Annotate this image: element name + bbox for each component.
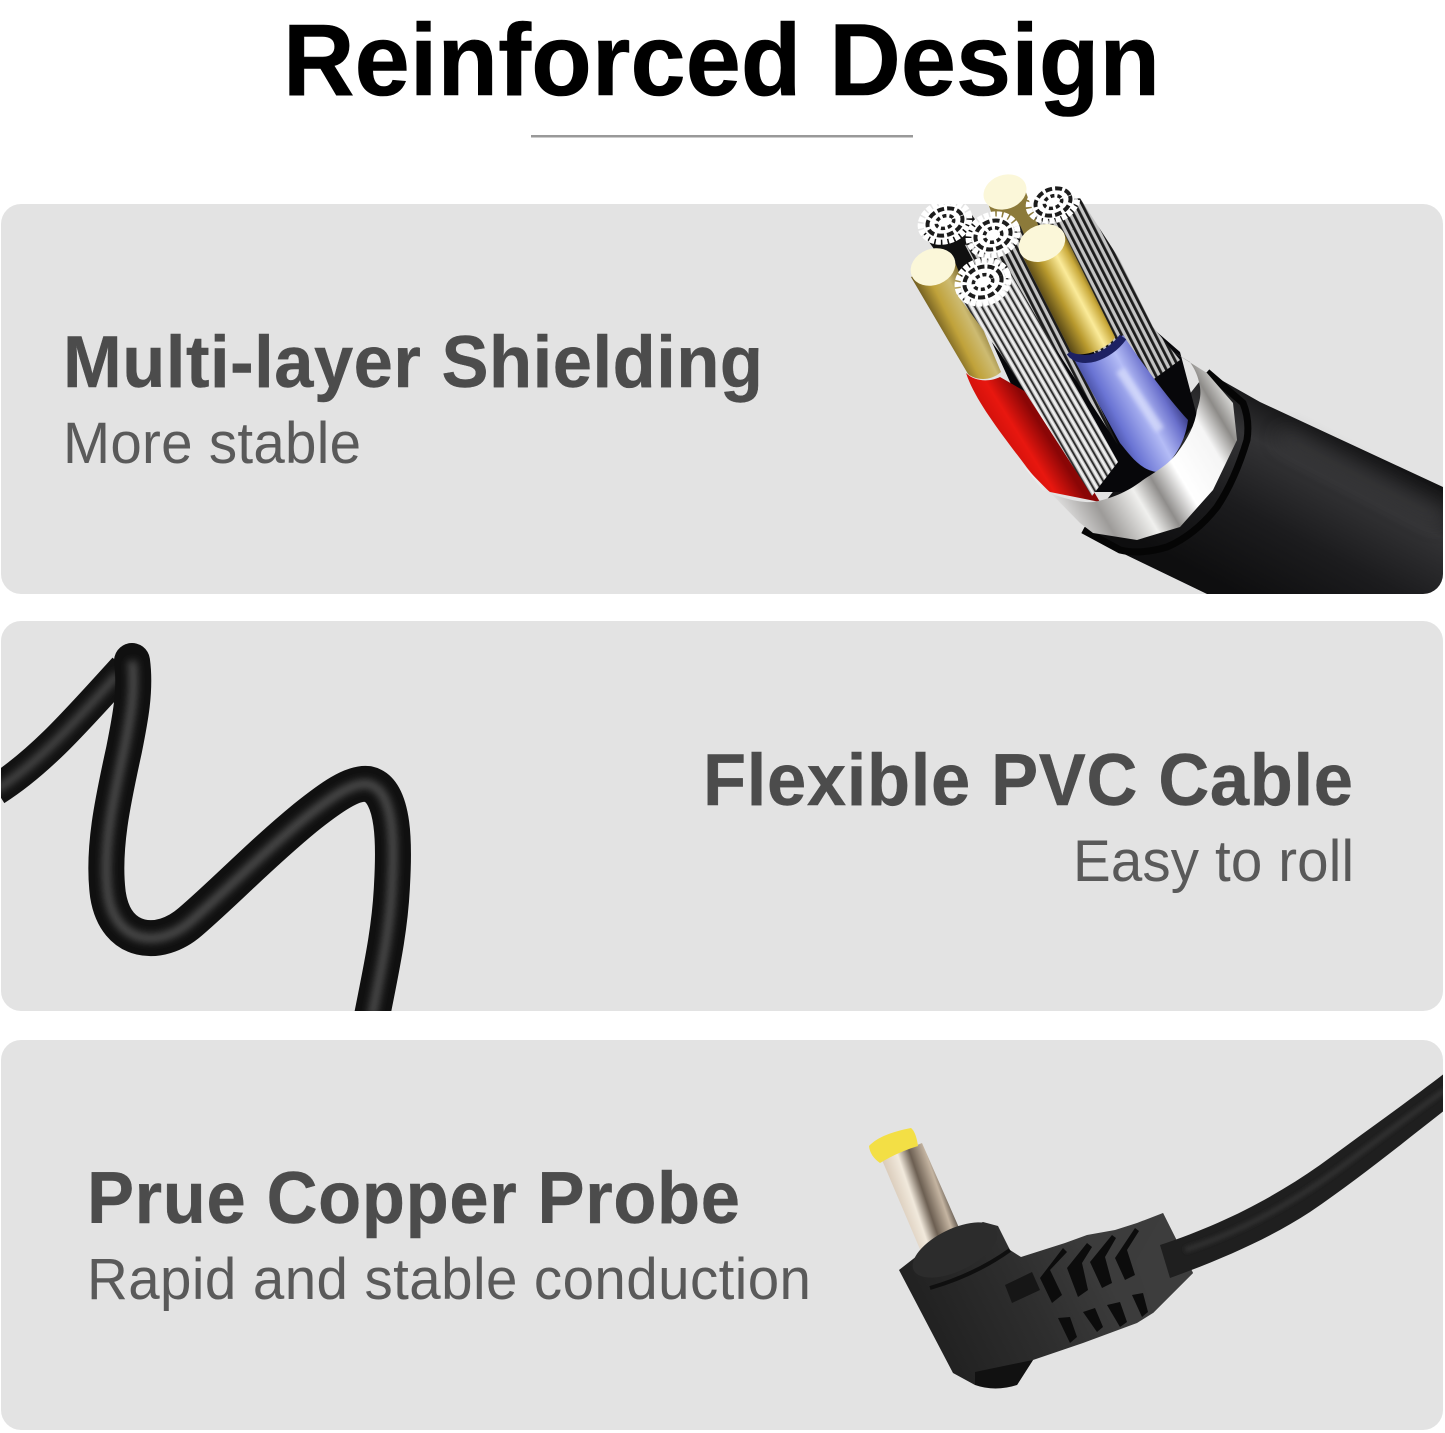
red insulation	[966, 373, 1100, 502]
subheading: more stable: More stable	[63, 411, 361, 476]
blue insulation	[1070, 335, 1188, 472]
silver strand: back right	[1030, 195, 1180, 400]
yellow tip	[869, 1128, 918, 1163]
illustration: coiled black cable	[0, 661, 393, 1016]
strand end: back right	[1023, 177, 1083, 227]
heading: multi-layer shielding: Multi-layer Shielding	[63, 322, 763, 403]
strand end: back left	[915, 196, 975, 248]
subheading: rapid and stable conduction: Rapid and stable conduction	[87, 1247, 811, 1312]
gold conductor: left	[911, 260, 1001, 379]
heading: copper probe: Prue Copper Probe	[87, 1158, 740, 1239]
heading: flexible PVC cable: Flexible PVC Cable	[703, 740, 1353, 821]
strain relief grooves	[1040, 1228, 1148, 1343]
panel: flexible PVC cable	[0, 621, 1443, 1016]
illustration: shielded cable cross-section	[905, 169, 1443, 594]
panel: pure copper probe	[1, 1040, 1445, 1430]
subheading: easy to roll: Easy to roll	[1073, 829, 1354, 894]
strand end: middle	[963, 208, 1023, 262]
gold conductor: right	[1021, 233, 1115, 354]
silver shield band	[1020, 350, 1237, 540]
metal pin	[882, 1143, 960, 1254]
illustration: right-angle DC plug	[869, 1073, 1445, 1388]
silver strand: back left	[922, 215, 1010, 300]
gold conductor: back	[985, 187, 1040, 250]
title: Reinforced Design	[283, 4, 1160, 117]
silver strand: front	[956, 275, 1118, 496]
strand end: front	[951, 253, 1015, 311]
plug housing	[899, 1213, 1193, 1385]
panel: multi-layer shielding	[1, 169, 1443, 594]
cable	[1160, 1073, 1445, 1278]
